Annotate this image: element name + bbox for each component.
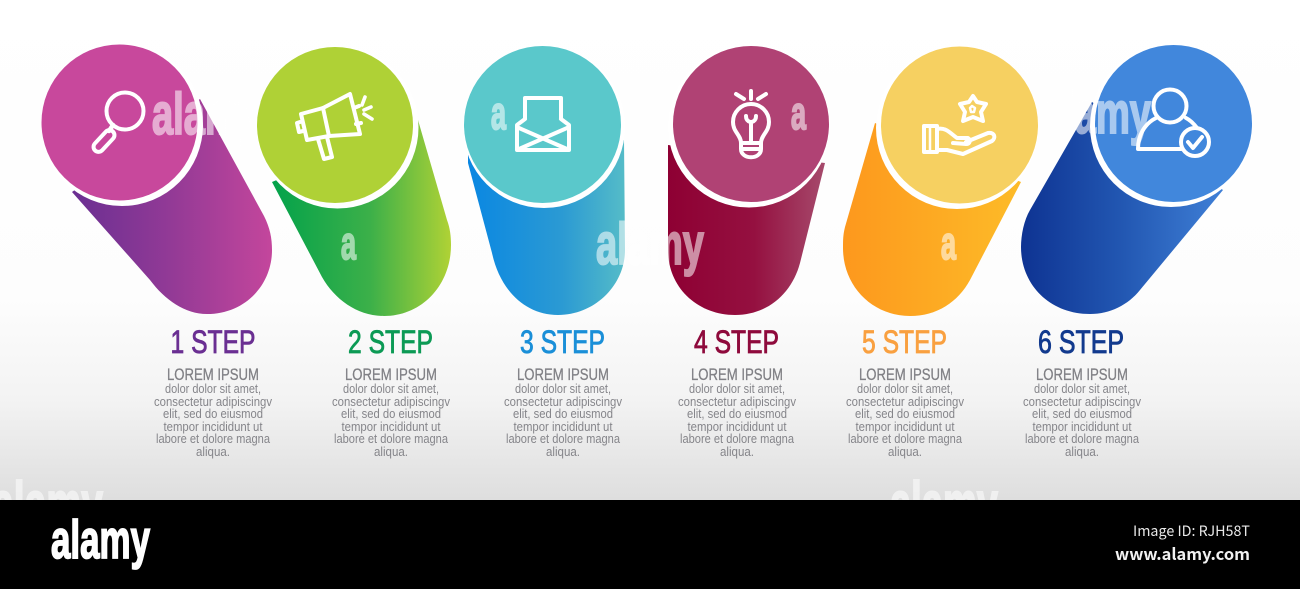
circle 5	[881, 46, 1038, 204]
cylinder 1	[72, 99, 272, 314]
body 5: dolor dolor sit amet,	[857, 381, 953, 396]
icon: megaphone	[297, 94, 372, 159]
step 2 text	[332, 324, 450, 459]
step 4 text	[678, 324, 796, 459]
body 2: aliqua.	[374, 444, 408, 459]
icon: verified user	[1138, 90, 1209, 156]
body 1: tempor incididunt ut	[164, 419, 263, 434]
body 5: LOREM IPSUM	[859, 365, 951, 384]
circle 1	[42, 44, 198, 200]
body 4: dolor dolor sit amet,	[689, 381, 785, 396]
watermark: bottom centre: alamy	[890, 470, 998, 537]
circle 4	[673, 46, 829, 202]
watermark: top right: alamy	[1043, 81, 1151, 146]
footer bar	[0, 500, 1300, 589]
watermark: centre: alamy	[596, 212, 704, 277]
image id: Image ID: RJH58T	[1133, 520, 1250, 541]
body 4: aliqua.	[720, 444, 754, 459]
heading 3: 3 STEP	[520, 324, 605, 360]
body 2	[332, 365, 450, 459]
body 3: LOREM IPSUM	[517, 365, 609, 384]
icon: open envelope	[517, 98, 569, 150]
body 5: consectetur adipiscingv	[846, 394, 964, 409]
step 3 graphic	[463, 46, 625, 315]
heading 6: 6 STEP	[1038, 324, 1124, 360]
cylinder 2	[272, 120, 451, 316]
step 6 text	[1023, 324, 1141, 459]
heading 5: 5 STEP	[862, 324, 947, 360]
body 1: LOREM IPSUM	[167, 365, 259, 384]
cylinder 5	[843, 123, 1021, 316]
ring 1	[41, 44, 203, 206]
body 6: LOREM IPSUM	[1036, 365, 1128, 384]
body 5: aliqua.	[888, 444, 922, 459]
icon: hand with star	[924, 96, 994, 154]
body 3: aliqua.	[546, 444, 580, 459]
body 2: consectetur adipiscingv	[332, 394, 450, 409]
body 3: dolor dolor sit amet,	[515, 381, 611, 396]
body 5: labore et dolore magna	[848, 431, 963, 446]
body 2: labore et dolore magna	[334, 431, 449, 446]
body 1: elit, sed do eiusmod	[163, 406, 263, 421]
body 1: dolor dolor sit amet,	[165, 381, 261, 396]
step 1 graphic	[41, 44, 272, 314]
body 6: dolor dolor sit amet,	[1034, 381, 1130, 396]
body 3: labore et dolore magna	[506, 431, 621, 446]
ring 4	[668, 46, 830, 208]
icon: magnifier	[91, 92, 144, 154]
body 1: labore et dolore magna	[156, 431, 271, 446]
step 6 graphic	[1021, 45, 1252, 314]
step 3 text	[504, 324, 622, 459]
body 6	[1023, 365, 1141, 459]
body 4: consectetur adipiscingv	[678, 394, 796, 409]
body 3: elit, sed do eiusmod	[513, 406, 613, 421]
body 6: aliqua.	[1065, 444, 1099, 459]
body 3	[504, 365, 622, 459]
body 4	[678, 365, 796, 459]
heading 2: 2 STEP	[348, 324, 433, 360]
heading 4: 4 STEP	[694, 324, 779, 360]
watermark: top left: alamy	[152, 82, 260, 147]
watermark: letter on circle 3: a	[491, 87, 506, 139]
body 6: labore et dolore magna	[1025, 431, 1140, 446]
watermark: letter on circle 4: a	[791, 87, 806, 139]
step 1 text	[154, 324, 272, 459]
body 4: LOREM IPSUM	[691, 365, 783, 384]
body 6: tempor incididunt ut	[1032, 419, 1132, 434]
body 4: labore et dolore magna	[680, 431, 795, 446]
body 5	[846, 365, 964, 459]
body 3: tempor incididunt ut	[514, 419, 613, 434]
body 2: elit, sed do eiusmod	[341, 406, 441, 421]
cylinder 6	[1021, 102, 1223, 314]
body 2: tempor incididunt ut	[342, 419, 441, 434]
step 5 text	[846, 324, 964, 459]
circle 6	[1095, 45, 1252, 202]
body 1: consectetur adipiscingv	[154, 394, 272, 409]
circle 3	[464, 46, 621, 203]
step 5 graphic	[843, 46, 1038, 316]
body 1	[154, 365, 272, 459]
ring 3	[463, 46, 625, 208]
body 2: dolor dolor sit amet,	[343, 381, 439, 396]
step 2 graphic	[256, 46, 451, 316]
circle 2	[257, 47, 413, 203]
ring 6	[1090, 45, 1252, 207]
ring 2	[256, 46, 418, 208]
body 3: consectetur adipiscingv	[504, 394, 622, 409]
footer logo: alamy	[51, 510, 150, 570]
ring 5	[876, 47, 1038, 209]
body 4: elit, sed do eiusmod	[687, 406, 787, 421]
body 1: aliqua.	[196, 444, 230, 459]
body 6: elit, sed do eiusmod	[1032, 406, 1132, 421]
body 2: LOREM IPSUM	[345, 365, 437, 384]
watermark: letter on cylinder 2: a	[341, 217, 356, 269]
body 5: elit, sed do eiusmod	[855, 406, 955, 421]
icon: light bulb	[733, 91, 769, 157]
body 5: tempor incididunt ut	[856, 419, 955, 434]
cylinder 3	[468, 140, 625, 315]
watermark: letter on cylinder 5: a	[941, 217, 956, 269]
watermark over graphics	[152, 81, 1151, 277]
step 4 graphic	[668, 46, 830, 315]
website: www.alamy.com	[1115, 541, 1250, 565]
heading 1: 1 STEP	[170, 324, 256, 360]
cylinder 4	[668, 145, 825, 315]
body 6: consectetur adipiscingv	[1023, 394, 1141, 409]
body 4: tempor incididunt ut	[688, 419, 787, 434]
